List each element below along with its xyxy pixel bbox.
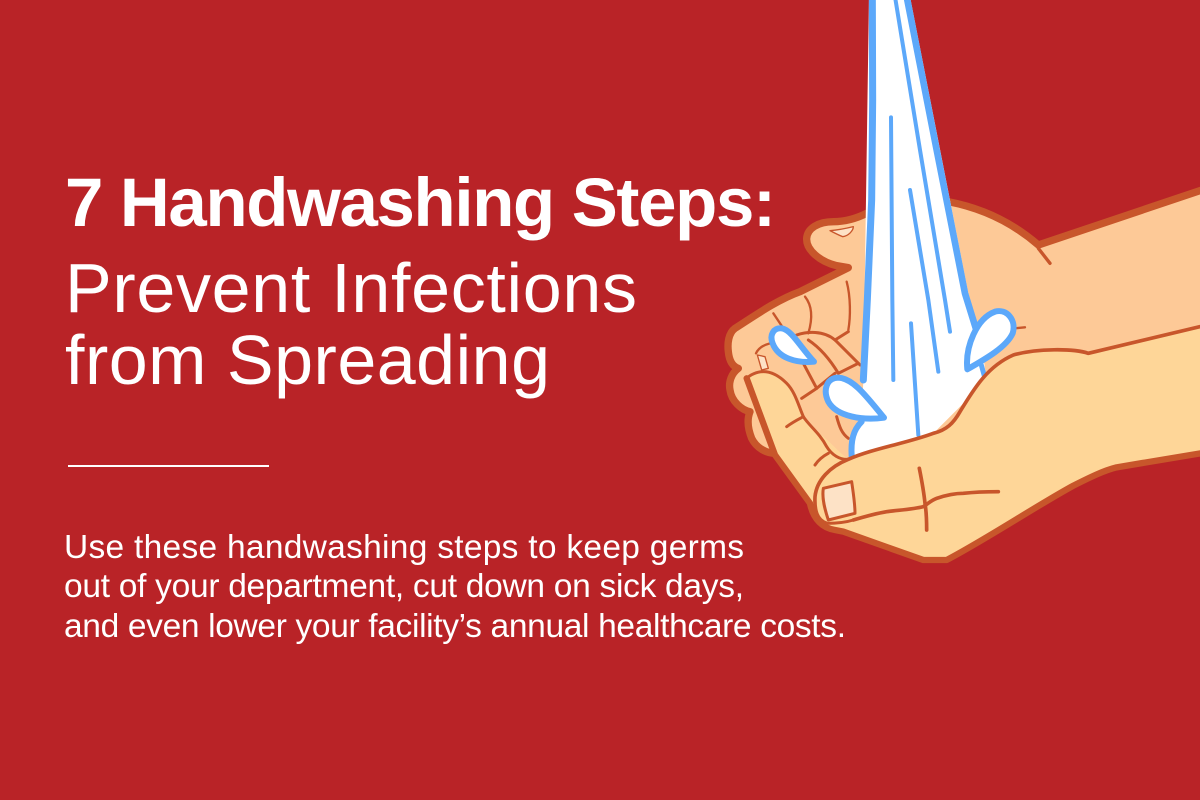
thumbnail: [823, 482, 855, 520]
fingernail: [757, 355, 768, 370]
divider line: [68, 465, 269, 467]
back hand: [728, 185, 1200, 500]
water droplets: [771, 311, 1014, 419]
body text: [64, 529, 846, 645]
front hand: [747, 322, 1200, 560]
water stream: [848, 0, 987, 459]
illustration: hands under running water: [728, 0, 1200, 560]
back thumb nail: [830, 227, 853, 237]
body line 1: Use these handwashing steps to keep germs: [64, 529, 744, 566]
body line 3: and even lower your facility’s annual healthcare costs.: [64, 608, 846, 645]
title: [65, 164, 776, 399]
droplet left: [771, 328, 814, 362]
heading: bold line: 7 Handwashing Steps:: [65, 164, 776, 241]
palm creases: [756, 248, 1050, 438]
droplet right: [967, 311, 1014, 369]
finger creases: [787, 417, 998, 530]
heading: third line: from Spreading: [65, 321, 550, 399]
heading: second line: Prevent Infections: [65, 249, 637, 327]
body line 2: out of your department, cut down on sick days,: [64, 568, 744, 605]
droplet centre: [826, 378, 884, 419]
inner water lines: [891, 0, 950, 435]
